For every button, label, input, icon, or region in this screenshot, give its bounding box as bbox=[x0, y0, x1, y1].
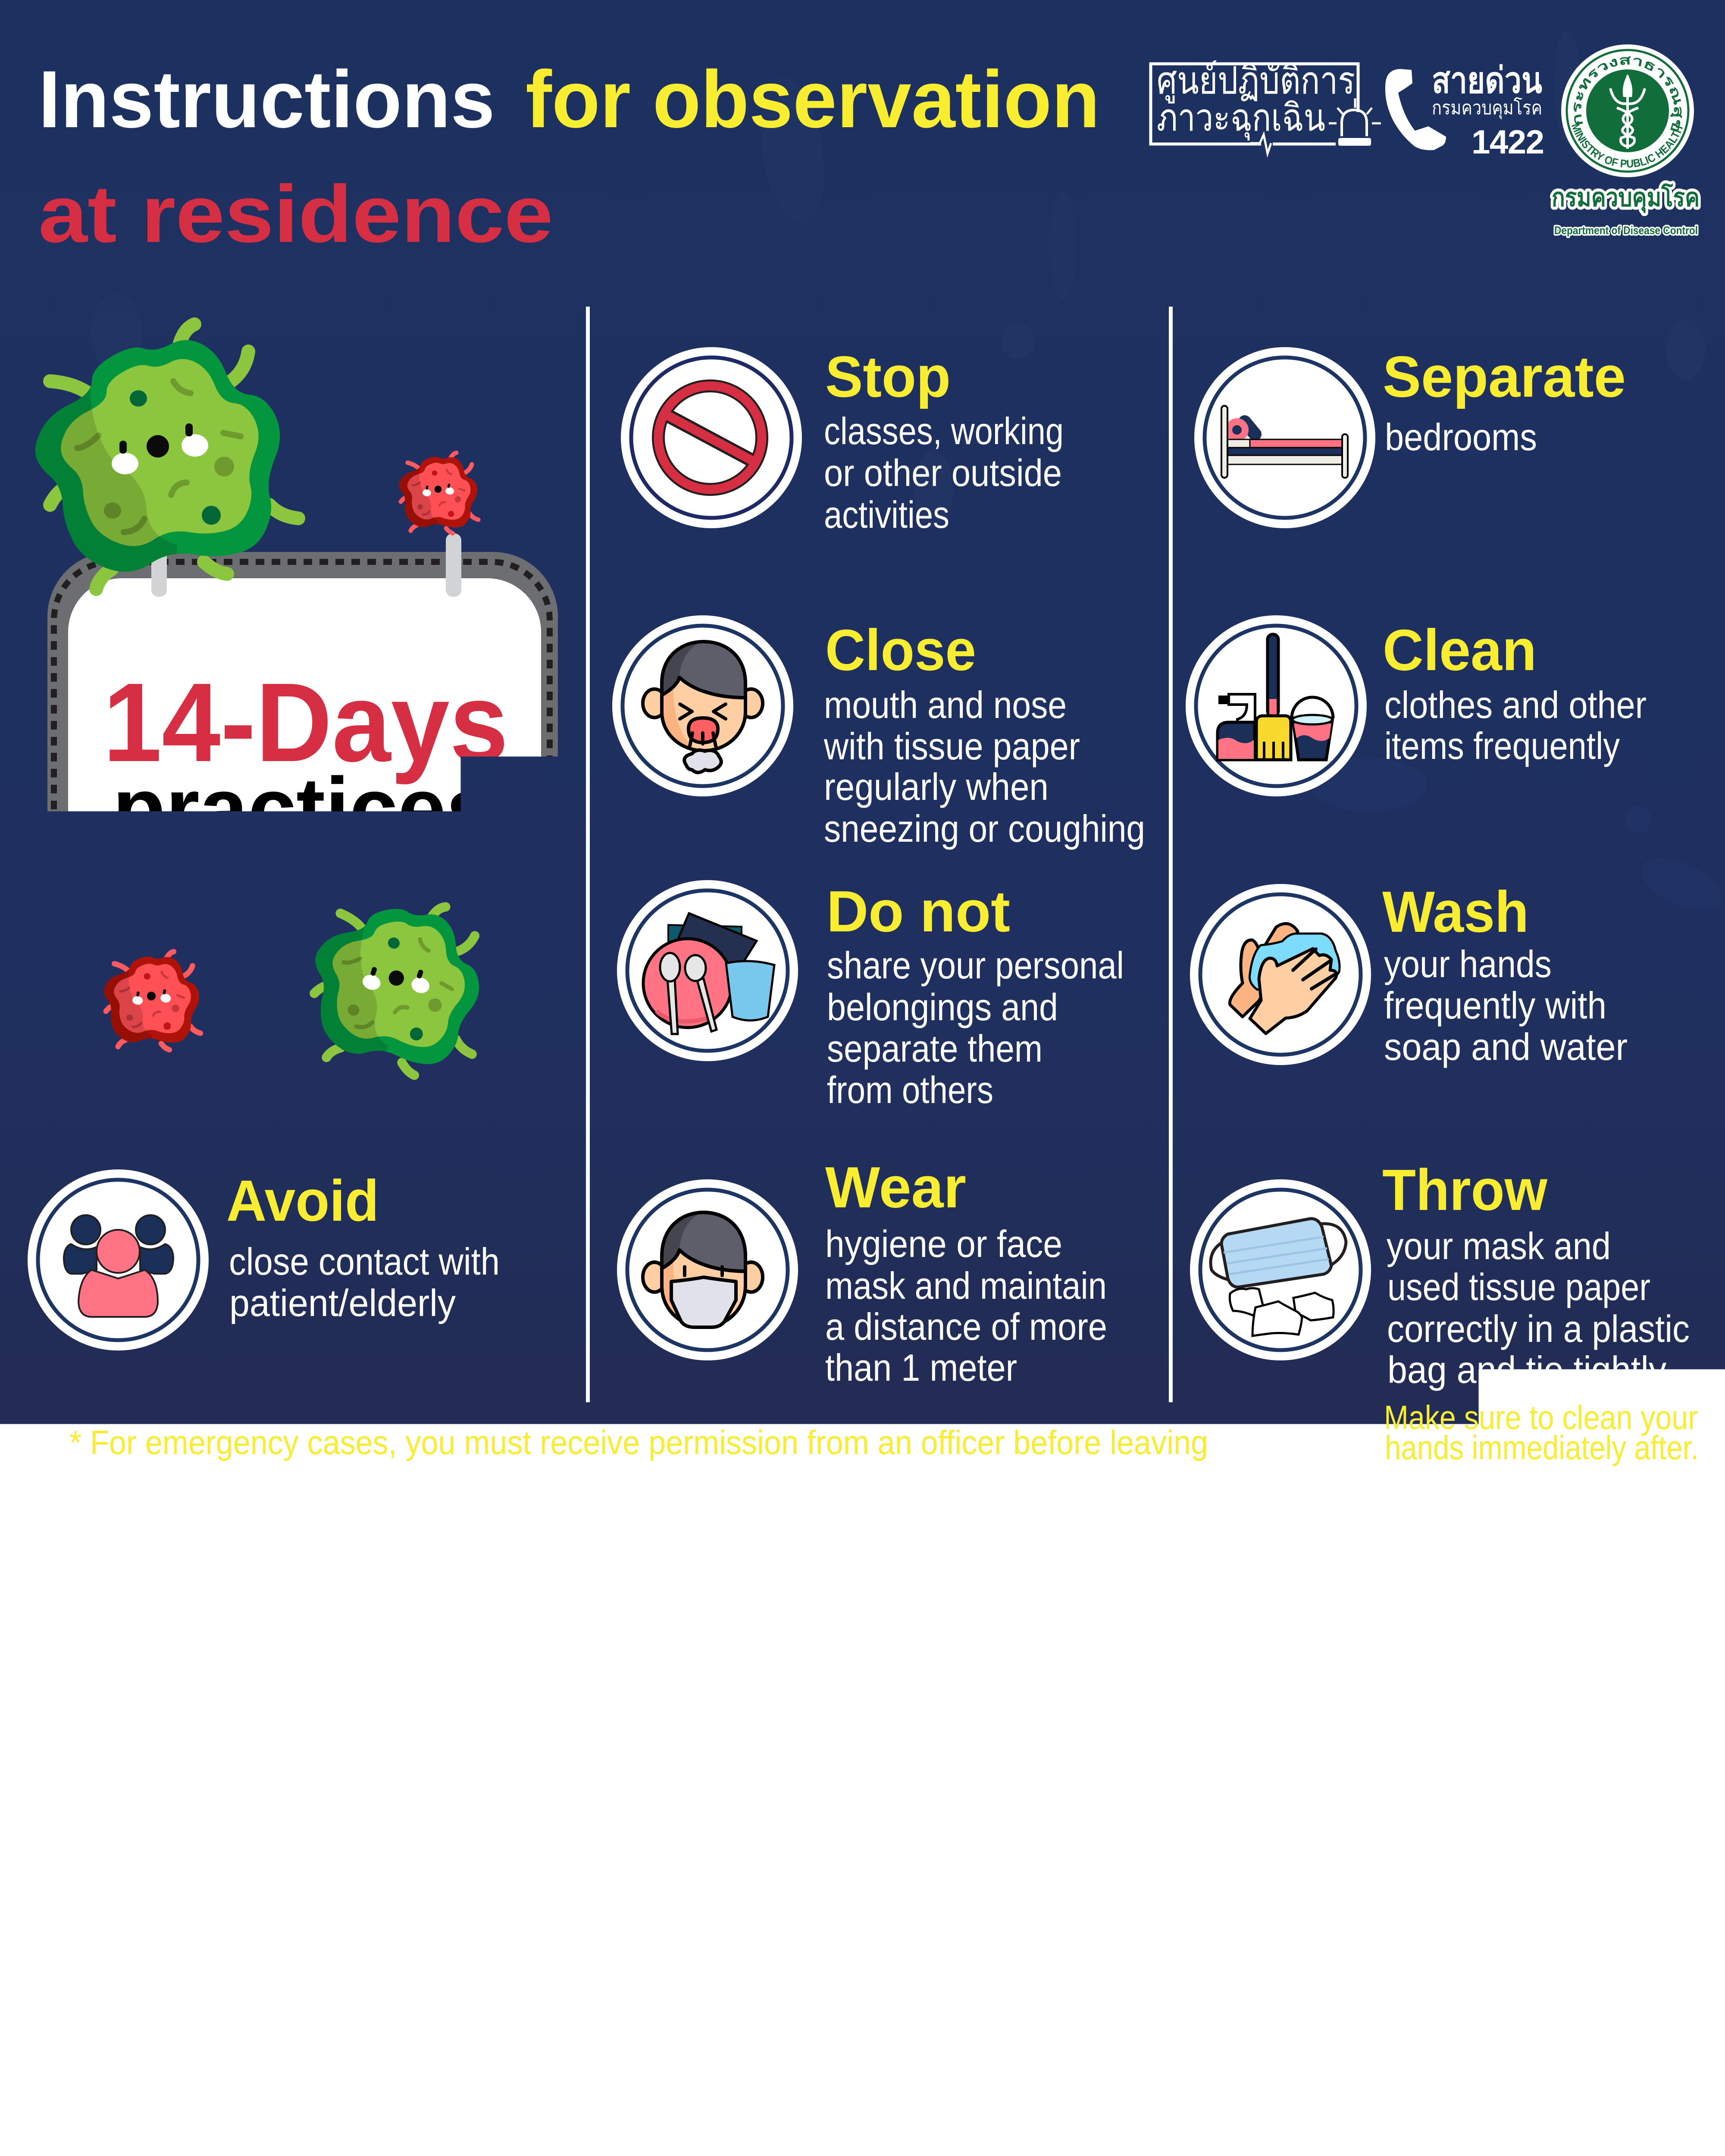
sign frame bbox=[47, 552, 558, 976]
icon: thermometer bbox=[842, 1604, 860, 1791]
icon: group of people bbox=[28, 1169, 209, 1351]
title bbox=[38, 54, 1100, 259]
panel: Stop bbox=[621, 344, 1064, 536]
arrow bbox=[1151, 1656, 1230, 1720]
hanging pins bbox=[151, 533, 461, 597]
heading: Separate bbox=[1383, 344, 1626, 409]
icon: plate, cutlery and glass bbox=[617, 880, 798, 1061]
heading: Close bbox=[825, 617, 976, 683]
description: classes, working bbox=[824, 410, 1064, 452]
symptom list: Observe your fever 37.5°C and respiratory bbox=[157, 1665, 794, 1708]
panel: Clean bbox=[1186, 615, 1647, 796]
facebook handle bbox=[1466, 2091, 1725, 2156]
virus: small red bottom bbox=[89, 940, 213, 1062]
description bbox=[1384, 943, 1628, 1068]
description: sneezing or coughing bbox=[824, 807, 1145, 850]
panel: Throw bbox=[1190, 1157, 1699, 1467]
description bbox=[229, 1240, 500, 1324]
description: from others bbox=[827, 1069, 993, 1111]
hotline text: 1422 bbox=[1471, 123, 1544, 161]
description: correctly in a plastic bbox=[1387, 1307, 1690, 1350]
panel: Avoid bbox=[28, 1168, 500, 1351]
description: a distance of more bbox=[825, 1305, 1107, 1348]
description: soap and water bbox=[1384, 1025, 1628, 1068]
sign: 14-Days practices bbox=[47, 533, 558, 976]
column divider bbox=[586, 307, 590, 1402]
facebook handle: f bbox=[1518, 2096, 1533, 2144]
hotline text: สายด่วน bbox=[1432, 60, 1542, 100]
symptom list: If you have a fever accompanied by at least one of the symptoms, bbox=[151, 1914, 1192, 1957]
sign subheading: practices bbox=[113, 759, 495, 858]
panel: Monitor your symptoms bbox=[58, 1480, 1676, 2072]
description: patient/elderly bbox=[229, 1282, 456, 1324]
logo: ministry of public health seal: MINISTRY OF PUBLIC HEALTH bbox=[1569, 122, 1685, 170]
heading: Clean bbox=[1383, 617, 1537, 683]
logo: emergency operations center bbox=[1151, 59, 1381, 154]
description bbox=[827, 944, 1124, 1111]
icon: face with mask bbox=[617, 1179, 798, 1360]
panel: Do not bbox=[617, 879, 1124, 1111]
description: your mask and bbox=[1387, 1225, 1611, 1267]
description: share your personal bbox=[827, 944, 1124, 987]
icon: used mask and tissues bbox=[1190, 1179, 1371, 1360]
logo: ministry of public health seal bbox=[1561, 44, 1694, 177]
virus: small red top bbox=[387, 443, 489, 544]
heading: Wash bbox=[1382, 879, 1529, 944]
description: frequently with bbox=[1384, 984, 1606, 1027]
column divider bbox=[1169, 307, 1173, 1402]
description: or other outside bbox=[824, 451, 1062, 494]
icon: washing hands with soap bbox=[1190, 884, 1371, 1065]
description: close contact with bbox=[229, 1240, 500, 1283]
description bbox=[823, 683, 1145, 850]
hand cleaning note bbox=[1384, 1398, 1699, 1467]
symptom list bbox=[107, 1608, 1192, 2015]
logo: department of disease control: กรมควบคุมโรค bbox=[1552, 182, 1700, 213]
virus: medium green bottom bbox=[277, 871, 513, 1103]
panel: Wash bbox=[1190, 879, 1628, 1068]
description: with tissue paper bbox=[823, 725, 1080, 768]
description: hygiene or face bbox=[825, 1222, 1062, 1265]
logo: emergency operations center: ศูนย์ปฏิบัติการ bbox=[1157, 59, 1355, 103]
description bbox=[1384, 683, 1647, 767]
description: regularly when bbox=[824, 765, 1049, 808]
logo: department of disease control: Department of Disease Control bbox=[1554, 224, 1698, 237]
description: than 1 meter bbox=[825, 1346, 1017, 1389]
icon: sick face with runny nose bbox=[877, 1562, 1121, 1821]
icon: hospital bbox=[1307, 1598, 1595, 1797]
description: used tissue paper bbox=[1387, 1266, 1650, 1308]
symptom list: Record your health status every day in the report system bbox=[151, 1841, 1035, 1883]
icon: cleaning supplies bbox=[1186, 615, 1367, 796]
logo: department of disease control bbox=[1552, 182, 1700, 237]
hotline text: กรมควบคุมโรค bbox=[1432, 97, 1542, 119]
symptom list: Check your body temperature every day bbox=[157, 1608, 800, 1651]
heading: Throw bbox=[1382, 1157, 1548, 1222]
heading: Monitor your symptoms bbox=[114, 1514, 860, 1586]
emergency note: * For emergency cases, you must receive permission from an officer before leaving bbox=[69, 1423, 1208, 1461]
logo: ministry of public health seal: กระทรวงสาธารณสุข bbox=[1569, 53, 1685, 135]
icon: bed bbox=[1194, 347, 1375, 528]
icon: sneezing face bbox=[612, 615, 793, 796]
panel: Wear bbox=[617, 1155, 1107, 1389]
description: your hands bbox=[1384, 943, 1552, 985]
facebook handle: OICDDC bbox=[1558, 2097, 1691, 2140]
description: separate them bbox=[827, 1027, 1043, 1070]
symptom list: symptoms (cough, sore throat, shortness bbox=[157, 1710, 794, 1752]
panel: Close bbox=[612, 615, 1145, 850]
icon: telephone bbox=[1385, 69, 1446, 150]
description: items frequently bbox=[1384, 724, 1620, 767]
description bbox=[1387, 1225, 1690, 1391]
heading: Do not bbox=[826, 879, 1010, 944]
description: belongings and bbox=[827, 986, 1058, 1028]
heading: Stop bbox=[825, 344, 951, 409]
symptom list: of breath) bbox=[157, 1755, 308, 1797]
icon: prohibition sign bbox=[621, 347, 802, 528]
description: bedrooms bbox=[1385, 416, 1537, 458]
description: mouth and nose bbox=[824, 683, 1067, 726]
description: bag and tie tightly. bbox=[1387, 1348, 1674, 1391]
description: clothes and other bbox=[1384, 683, 1647, 726]
heading: Wear bbox=[825, 1155, 966, 1220]
title: for observation bbox=[526, 54, 1100, 144]
heading: Avoid bbox=[226, 1168, 379, 1233]
title: at residence bbox=[38, 169, 553, 259]
symptom list: you are to inform of disease control officer immediately bbox=[150, 1973, 1190, 2015]
description: activities bbox=[824, 493, 949, 536]
background virus blobs bbox=[91, 30, 1725, 921]
description bbox=[824, 410, 1064, 536]
description: mask and maintain bbox=[825, 1264, 1107, 1307]
description bbox=[825, 1222, 1107, 1389]
sign heading: 14-Days bbox=[103, 660, 508, 786]
hotline text bbox=[1432, 60, 1544, 161]
panel: Separate bbox=[1194, 344, 1626, 528]
virus: large green bbox=[22, 324, 298, 594]
logo: emergency operations center: ภาวะฉุกเฉิน bbox=[1157, 96, 1325, 141]
date: Date : 23/03/63 bbox=[24, 2099, 295, 2141]
title: Instructions bbox=[38, 54, 495, 144]
